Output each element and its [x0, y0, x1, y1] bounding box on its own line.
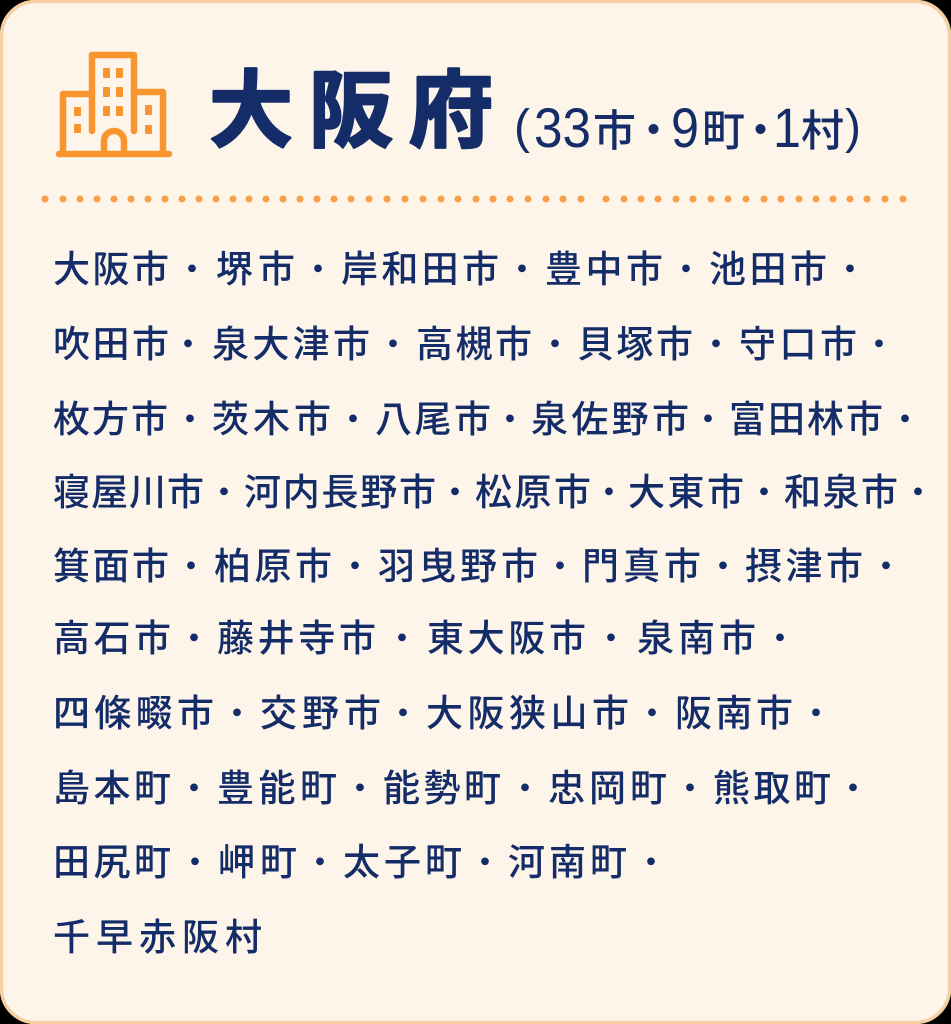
list line 2: 吹田市 [53, 324, 169, 365]
list line 9: ・ [470, 847, 500, 880]
list line 2 [53, 324, 894, 365]
list line 5: ・ [545, 551, 575, 584]
list line 6: 高石市 [53, 618, 171, 659]
list line 3: ・ [495, 404, 525, 437]
list line 4: 和泉市 [784, 472, 898, 513]
list line 5: ・ [176, 551, 206, 584]
list line 2: ・ [864, 329, 894, 362]
list line 3: ・ [693, 404, 723, 437]
list line 4: 松原市 [475, 472, 591, 513]
list line 5: 門真市 [582, 546, 701, 587]
list line 8 [53, 768, 868, 809]
list line 2: ・ [701, 329, 731, 362]
list line 5: ・ [708, 551, 738, 584]
list line 1 [53, 249, 865, 290]
list line 8: ・ [345, 773, 375, 806]
list line 4: 河内長野市 [244, 472, 436, 513]
list line 9: 太子町 [343, 842, 462, 883]
title: 大阪府 [209, 64, 493, 158]
list line 7: ・ [801, 698, 831, 731]
list line 1: 池田市 [709, 249, 827, 290]
list line 3 [53, 399, 920, 440]
list line 7: 阪南市 [675, 693, 793, 734]
dotted divider [42, 196, 906, 202]
list line 9: ・ [180, 847, 210, 880]
list line 6 [53, 618, 795, 659]
list line 9: ・ [636, 847, 666, 880]
subtitle: municipality counts: ( [514, 101, 530, 154]
subtitle: municipality counts: 町 [702, 97, 745, 159]
list line 5: 箕面市 [53, 546, 169, 587]
list line 6: ・ [179, 623, 209, 656]
list line 10: 千早赤阪村 [53, 917, 262, 958]
list line 3: 枚方市 [53, 399, 168, 440]
list line 2: ・ [378, 329, 408, 362]
list line 5: 羽曳野市 [378, 546, 538, 587]
list line 7: ・ [388, 698, 418, 731]
list line 9: 田尻町 [53, 842, 171, 883]
list line 9: ・ [305, 847, 335, 880]
list line 5: 摂津市 [745, 546, 863, 587]
list line 1: 堺市 [216, 249, 295, 290]
list line 8: ・ [179, 773, 209, 806]
list line 8: 島本町 [53, 768, 171, 809]
list line 3: 茨木市 [212, 399, 331, 440]
list line 6: ・ [387, 623, 417, 656]
list line 2: ・ [173, 329, 203, 362]
list line 2: 泉大津市 [212, 324, 370, 365]
subtitle: municipality counts: ・ [741, 110, 780, 153]
subtitle: municipality counts: 1 [773, 96, 801, 159]
subtitle: municipality counts: 9 [671, 96, 699, 159]
list line 3: 泉佐野市 [531, 399, 689, 440]
list line 3: 八尾市 [375, 399, 491, 440]
list line 8: 能勢町 [383, 768, 501, 809]
list line 1: 大阪市 [53, 249, 169, 290]
list line 6: 東大阪市 [427, 618, 586, 659]
list line 1: ・ [507, 254, 537, 287]
list line 4 [53, 472, 933, 513]
list line 3: 富田林市 [729, 399, 883, 440]
icon: office buildings [59, 55, 169, 154]
list line 4: 寝屋川市 [53, 472, 204, 513]
list line 6: 藤井寺市 [217, 618, 376, 659]
subtitle: municipality counts [514, 96, 861, 159]
list line 1: ・ [303, 254, 333, 287]
list line 2: ・ [540, 329, 570, 362]
list line 8: 豊能町 [217, 768, 337, 809]
list line 8: ・ [838, 773, 868, 806]
list line 8: ・ [675, 773, 705, 806]
list line 7: 大阪狭山市 [426, 693, 629, 734]
list line 1: 岸和田市 [341, 249, 499, 290]
list line 1: ・ [835, 254, 865, 287]
list line 8: ・ [510, 773, 540, 806]
list line 9: 河南町 [508, 842, 627, 883]
municipality list [53, 249, 933, 958]
list line 3: ・ [175, 404, 205, 437]
list line 5: ・ [340, 551, 370, 584]
list line 4: ・ [749, 477, 779, 510]
list line 6: 泉南市 [637, 618, 756, 659]
list line 3: ・ [338, 404, 368, 437]
list line 9 [53, 842, 666, 883]
list line 5 [53, 546, 901, 587]
list line 8: 忠岡町 [548, 768, 667, 809]
list line 1: 豊中市 [545, 249, 663, 290]
subtitle: municipality counts: 村 [801, 97, 844, 159]
list line 4: ・ [209, 477, 239, 510]
subtitle: municipality counts: 市 [593, 97, 636, 159]
list line 2: 高槻市 [416, 324, 532, 365]
subtitle: municipality counts: ) [845, 101, 861, 154]
list line 7: ・ [222, 698, 252, 731]
list line 2: 貝塚市 [577, 324, 693, 365]
list line 4: ・ [594, 477, 624, 510]
subtitle: municipality counts: ・ [634, 110, 673, 153]
list line 5: 柏原市 [214, 546, 332, 587]
list line 6: ・ [596, 623, 626, 656]
list line 4: ・ [903, 477, 933, 510]
list line 7: 四條畷市 [53, 693, 214, 734]
list line 2: 守口市 [739, 324, 857, 365]
list line 7 [53, 693, 831, 734]
list line 4: 大東市 [628, 472, 744, 513]
list line 6: ・ [765, 623, 795, 656]
list line 7: 交野市 [260, 693, 381, 734]
list line 5: ・ [871, 551, 901, 584]
subtitle: municipality counts: 33 [534, 96, 591, 159]
list line 1: ・ [671, 254, 701, 287]
list line 4: ・ [440, 477, 470, 510]
list line 3: ・ [890, 404, 920, 437]
list line 8: 熊取町 [713, 768, 831, 809]
list line 7: ・ [637, 698, 667, 731]
list line 9: 岬町 [218, 842, 297, 883]
list line 1: ・ [177, 254, 207, 287]
